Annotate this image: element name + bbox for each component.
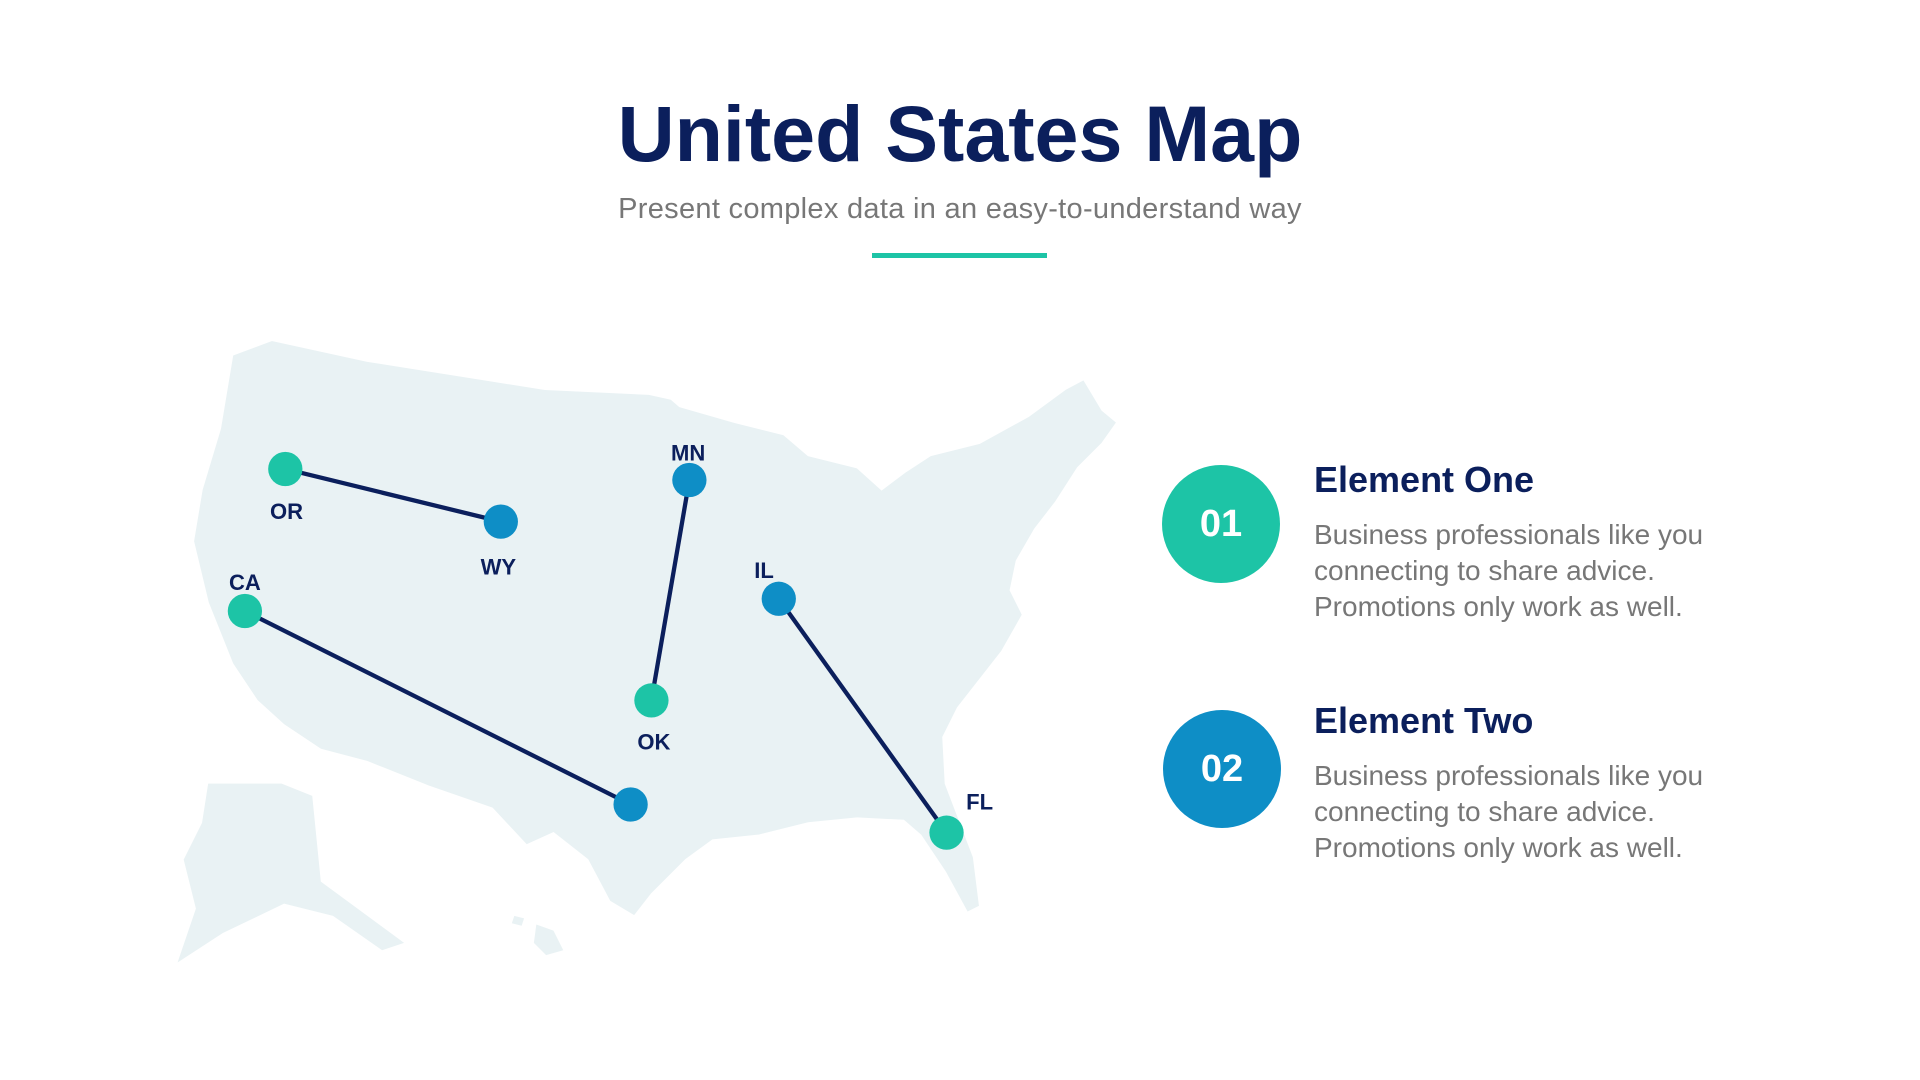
body one xyxy=(1314,519,1703,622)
body two: connecting to share advice. xyxy=(1314,796,1655,827)
body one: Promotions only work as well. xyxy=(1314,591,1683,622)
title underline xyxy=(872,253,1047,258)
connector lines xyxy=(245,469,947,833)
state labels: OR xyxy=(270,499,303,524)
state labels: IL xyxy=(754,558,774,583)
badge 01 xyxy=(1162,465,1280,583)
subtitle: Present complex data in an easy-to-understand way xyxy=(618,193,1302,225)
body two: Promotions only work as well. xyxy=(1314,832,1683,863)
badge 02: 02 xyxy=(1201,748,1243,790)
badge 01: 01 xyxy=(1200,503,1242,545)
map dots xyxy=(228,452,964,850)
body one: Business professionals like you xyxy=(1314,519,1703,550)
badge 02 xyxy=(1163,710,1281,828)
state labels: MN xyxy=(671,440,705,465)
body two xyxy=(1314,760,1703,863)
map: alaska xyxy=(178,784,404,962)
element two xyxy=(1163,700,1703,863)
heading two: Element Two xyxy=(1314,700,1533,741)
element one xyxy=(1162,459,1703,622)
map: hawaii xyxy=(512,916,563,955)
body one: connecting to share advice. xyxy=(1314,555,1655,586)
state labels: CA xyxy=(229,570,261,595)
heading one: Element One xyxy=(1314,459,1534,500)
state labels: OK xyxy=(637,729,670,754)
state labels xyxy=(229,440,993,814)
state labels: WY xyxy=(481,554,516,579)
map: contiguous US xyxy=(193,340,1117,916)
title: United States Map xyxy=(618,89,1302,178)
state labels: FL xyxy=(966,789,993,814)
body two: Business professionals like you xyxy=(1314,760,1703,791)
